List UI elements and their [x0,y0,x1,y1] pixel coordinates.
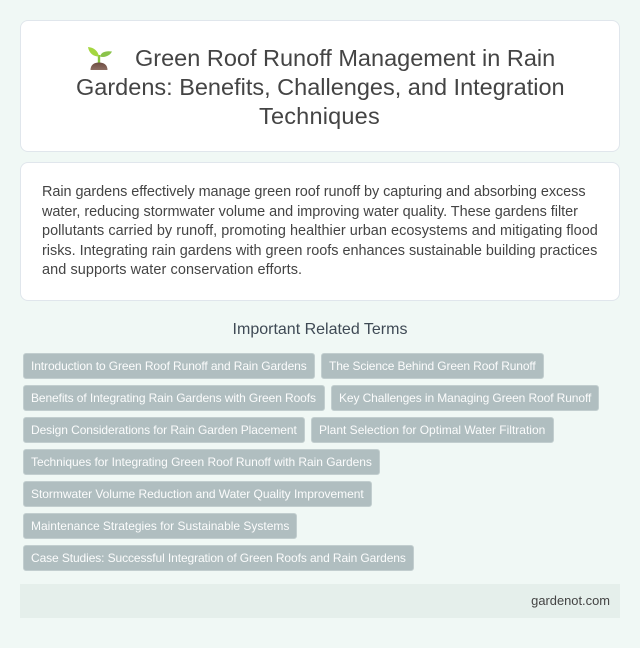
tag: Introduction to Green Roof Runoff and Rain Gardens [31,359,307,373]
summary text: Rain gardens effectively manage green roof runoff by capturing and absorbing excess [42,184,585,200]
title: Green Roof Runoff Management in Rain [135,45,555,71]
tag: Key Challenges in Managing Green Roof Runoff [339,391,591,405]
tag: Maintenance Strategies for Sustainable Systems [31,519,289,533]
tag: Techniques for Integrating Green Roof Runoff with Rain Gardens [31,455,372,469]
tag list [23,353,599,571]
tag [331,385,599,411]
tag: Design Considerations for Rain Garden Placement [31,423,297,437]
heading: important related terms: Important Related Terms [233,321,407,338]
footer bar [20,584,620,618]
footer source: gardenot.com [531,592,610,608]
tag: Stormwater Volume Reduction and Water Quality Improvement [31,487,364,501]
summary text: risks. Integrating rain gardens with green roofs enhances sustainable building practices [42,242,597,258]
panel: summary card [20,162,620,301]
tag [23,513,297,539]
tag: Plant Selection for Optimal Water Filtration [319,423,545,437]
tag [23,385,325,411]
tag: The Science Behind Green Roof Runoff [329,359,536,373]
title: Techniques [259,103,380,129]
title: Gardens: Benefits, Challenges, and Integration [76,74,565,100]
tag [23,545,414,571]
summary text [42,184,598,278]
title [76,45,565,129]
tag [23,449,380,475]
summary text: pollutants carried by runoff, promoting healthier urban ecosystems and mitigating flood [42,223,598,239]
tag [23,353,315,379]
tag: Benefits of Integrating Rain Gardens with Green Roofs [31,391,316,405]
tag [321,353,544,379]
panel: title card [20,20,620,152]
tag [23,481,372,507]
summary text: water, reducing stormwater volume and improving water quality. These gardens filter [42,204,578,220]
tag [23,417,305,443]
tag: Case Studies: Successful Integration of Green Roofs and Rain Gardens [31,551,406,565]
icon: seedling [88,47,112,70]
summary text: and supports water conservation efforts. [42,262,302,278]
tag [311,417,554,443]
